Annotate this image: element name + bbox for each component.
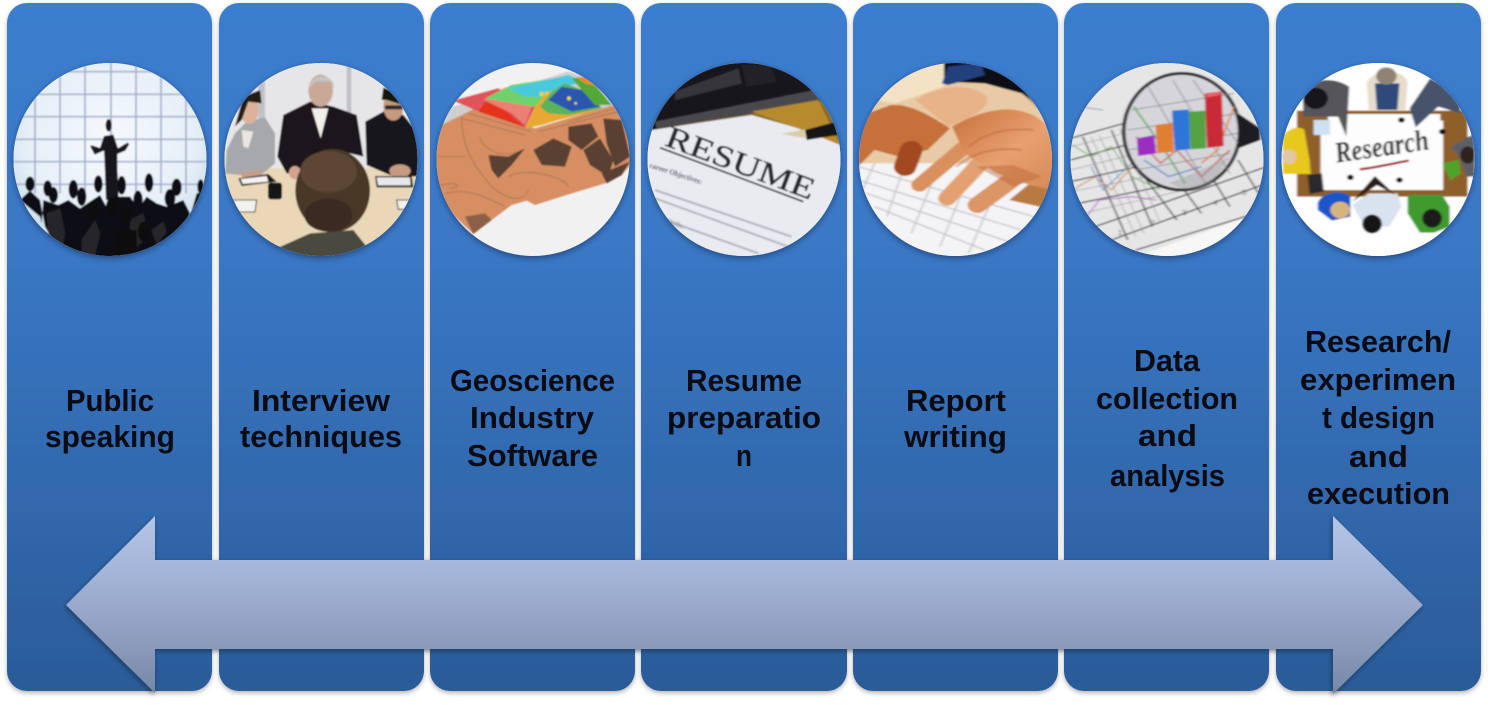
label: Interview techniques <box>240 383 402 454</box>
label: Geoscience Industry Software <box>450 363 615 473</box>
label: Geoscience Industry Software: Industry <box>470 400 595 435</box>
label: Interview techniques: techniques <box>240 419 402 454</box>
label: Geoscience Industry Software: Geoscience <box>450 363 615 398</box>
label: Public speaking: speaking <box>45 419 175 454</box>
panel: report writing <box>853 3 1058 691</box>
panel: geoscience industry software <box>430 3 635 691</box>
icon: speaker before audience photo <box>10 60 210 263</box>
label: Report writing: writing <box>903 419 1007 454</box>
icon: magnifying glass over bar chart: 4 <box>1213 199 1218 207</box>
label: Data collection and analysis: Data <box>1134 343 1201 378</box>
label: Research/experiment design and execution: and <box>1349 439 1408 474</box>
label: Interview techniques: Interview <box>252 383 391 418</box>
label: Resume preparation <box>667 363 821 473</box>
panel: data collection and analysis <box>1064 3 1269 691</box>
icon: resume document photo: career Objectives: <box>648 161 703 186</box>
label: Research/experiment design and execution: Research/ <box>1305 324 1451 359</box>
label: Public speaking: Public <box>66 383 154 418</box>
icon: resume document photo: Skills: <box>665 216 686 231</box>
panel: resume preparation <box>641 3 847 691</box>
icon: magnifying glass over bar chart: 3 <box>1182 209 1187 217</box>
label: Data collection and analysis <box>1096 343 1238 493</box>
icon: resume document photo: RESUME <box>661 120 820 206</box>
label: Resume preparation: preparatio <box>667 400 821 435</box>
icon: magnifying glass over bar chart: 1 <box>1118 229 1123 237</box>
label: Research/experiment design and execution: experimen <box>1300 362 1456 397</box>
icon: magnifying glass over bar chart: 5 <box>1241 189 1247 197</box>
icon: team around research table: Research <box>1331 125 1432 170</box>
arrow: double-headed spectrum arrow <box>66 516 1423 694</box>
panel: interview techniques <box>219 3 424 691</box>
label: Data collection and analysis: collection <box>1096 381 1238 416</box>
label: Research/experiment design and execution: t design <box>1322 400 1435 435</box>
label: Public speaking <box>45 383 175 454</box>
icon: magnifying glass over bar chart <box>1070 60 1267 257</box>
icon: 3D geoscience terrain model <box>433 63 632 256</box>
icon: magnifying glass over bar chart: 2 <box>1150 219 1156 227</box>
label: Data collection and analysis: analysis <box>1110 458 1225 493</box>
icon: team around research table <box>1282 60 1479 257</box>
icon: interview panel photo <box>223 60 423 263</box>
icon: hands typing photo <box>858 60 1054 260</box>
label: Data collection and analysis: and <box>1138 418 1197 453</box>
label: Resume preparation: n <box>736 438 752 473</box>
label: Report writing <box>903 383 1007 454</box>
panel: research and experiment design <box>1276 3 1481 691</box>
label: Research/experiment design and execution <box>1300 324 1456 511</box>
label: Report writing: Report <box>906 383 1006 418</box>
label: Research/experiment design and execution: execution <box>1307 476 1450 511</box>
label: Resume preparation: Resume <box>686 363 802 398</box>
icon: resume document photo <box>645 60 845 260</box>
panel: public speaking <box>7 3 212 691</box>
label: Geoscience Industry Software: Software <box>467 438 598 473</box>
